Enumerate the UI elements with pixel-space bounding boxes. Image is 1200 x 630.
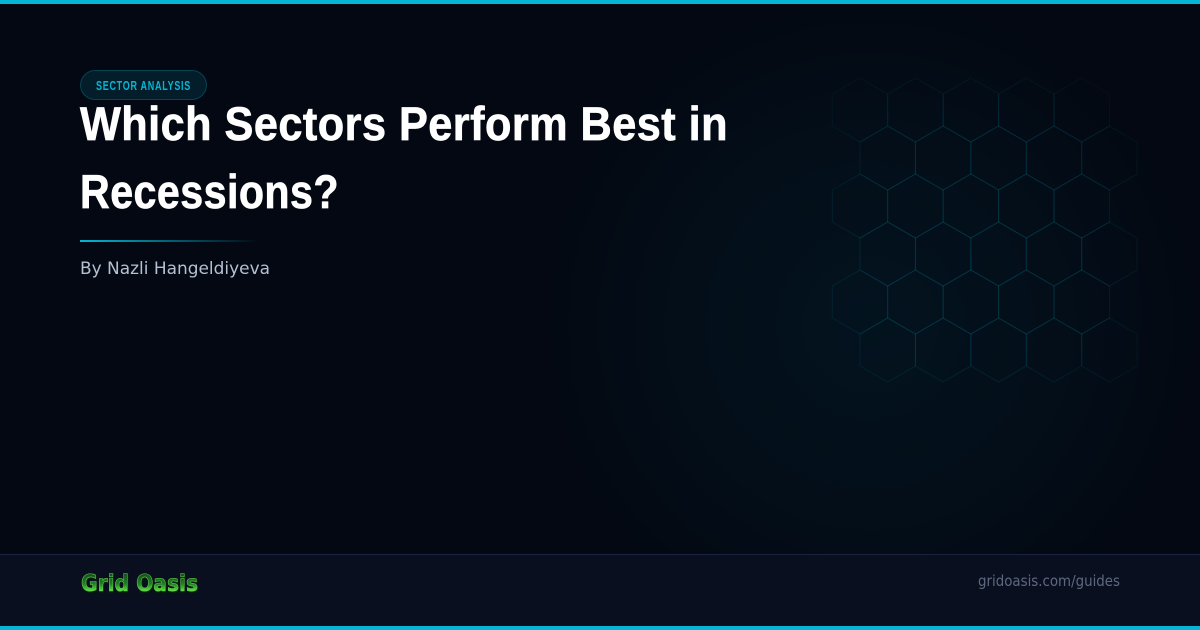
- footer bar: [0, 554, 1200, 626]
- badge: sector analysis: SECTOR ANALYSIS: [96, 79, 191, 93]
- title divider: [80, 240, 260, 242]
- top accent bar: [0, 0, 1200, 4]
- byline: By Nazli Hangeldiyeva: [80, 259, 270, 279]
- footer url: gridoasis.com/guides: [978, 572, 1120, 590]
- logo: Grid Oasis: Grid Oasis: [82, 572, 198, 598]
- title: Recessions?: [80, 165, 339, 218]
- hexagon pattern: [832, 78, 1137, 382]
- background glow: [530, 0, 1200, 554]
- title: Which Sectors Perform Best in: [80, 97, 728, 150]
- title: [80, 97, 728, 218]
- logo: Grid Oasis: Grid Oasis: [81, 571, 198, 597]
- bottom accent bar: [0, 626, 1200, 630]
- badge: sector analysis: [80, 70, 206, 100]
